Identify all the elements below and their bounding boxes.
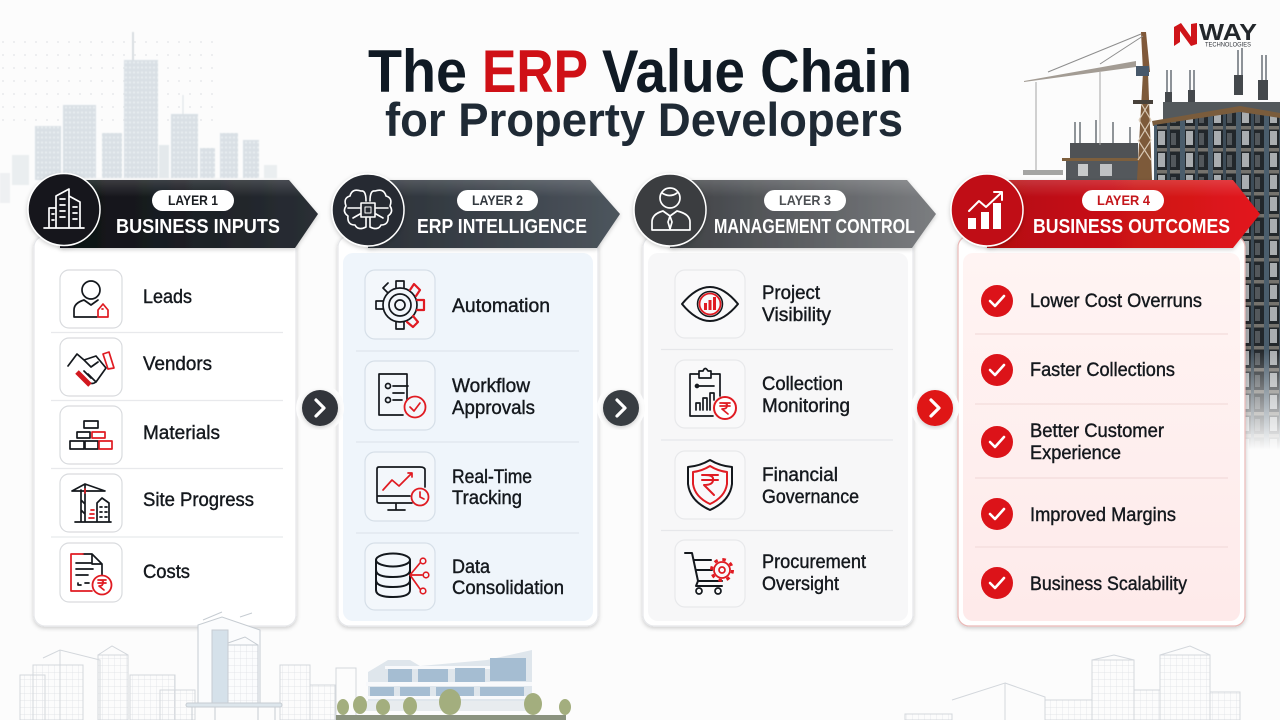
item: site progress (60, 474, 254, 532)
layer 1 pill (152, 190, 234, 211)
panel 3 header (634, 174, 936, 248)
item: collection monitoring (675, 360, 850, 428)
panel 4 header: LAYER 4 (1097, 192, 1150, 208)
construction photo, top right (1023, 32, 1280, 475)
item: data consolidation: Consolidation (452, 578, 564, 599)
item: improved margins: Improved Margins (1030, 505, 1176, 526)
item: data consolidation (365, 543, 564, 610)
arrow: layer 1 to layer 2 (296, 384, 344, 432)
item: procurement oversight (675, 540, 867, 607)
item: real-time tracking: Tracking (452, 488, 522, 509)
panel 1 header: BUSINESS INPUTS (116, 216, 280, 238)
layer 2 pill (457, 190, 538, 211)
item: workflow approvals: Workflow (452, 376, 530, 397)
arrow: layer 2 to layer 3 (597, 384, 645, 432)
item: business scalability (981, 567, 1187, 599)
panel: layer 2 erp intelligence (332, 174, 620, 626)
sketch cityscape, bottom right (905, 646, 1240, 720)
panel 4 header: BUSINESS OUTCOMES (1033, 216, 1230, 238)
tower crane (1024, 32, 1153, 180)
panel 1 header (28, 174, 318, 248)
small building under construction (1023, 120, 1142, 181)
title: Value Chain (602, 38, 912, 105)
title: ERP (482, 38, 588, 105)
sketch cityscape, bottom left (20, 646, 356, 720)
dotted background pattern (0, 30, 220, 130)
icon: brain with chip (344, 190, 392, 229)
arrow: layer 3 to layer 4 (911, 384, 959, 432)
item: better customer experience: Experience (1030, 443, 1121, 464)
item: better customer experience: Better Customer (1030, 421, 1165, 442)
item: real-time tracking: Real-Time (452, 467, 532, 488)
title (368, 38, 912, 146)
item: vendors: Vendors (143, 354, 212, 375)
item: automation (365, 270, 550, 339)
logo: NWAY Technologies: WAY (1199, 19, 1257, 45)
logo: NWAY Technologies: TECHNOLOGIES (1205, 42, 1251, 48)
sketch building with blue glass (186, 612, 282, 720)
item: project visibility: Visibility (762, 305, 832, 326)
item: materials (60, 406, 220, 464)
main concrete building (1152, 48, 1280, 470)
panel 1 header: LAYER 1 (168, 192, 218, 208)
item: leads (60, 270, 192, 328)
panel 4 card (958, 236, 1245, 626)
item: lower cost overruns: Lower Cost Overruns (1030, 291, 1202, 312)
item: faster collections (981, 354, 1175, 386)
modern building with trees (336, 650, 571, 720)
item: data consolidation: Data (452, 557, 490, 578)
icon: office buildings (44, 189, 84, 228)
item: workflow approvals (365, 361, 535, 430)
item: procurement oversight: Oversight (762, 574, 840, 595)
title: The (368, 38, 467, 105)
layer 4 pill (1082, 190, 1164, 211)
layer 3 pill (764, 190, 846, 211)
icon: growth chart (968, 192, 1002, 229)
panel 2 header: LAYER 2 (472, 192, 523, 208)
item: collection monitoring: Monitoring (762, 396, 850, 417)
item: procurement oversight: Procurement (762, 552, 867, 573)
fade of building into page (1150, 350, 1280, 450)
item: financial governance: Governance (762, 487, 859, 508)
panel 2 header (332, 174, 620, 248)
panel 4 header (951, 174, 1260, 248)
item: faster collections: Faster Collections (1030, 360, 1175, 381)
item: real-time tracking (365, 452, 532, 521)
skyline illustration, top left (0, 32, 277, 203)
panel: layer 4 business outcomes (951, 174, 1260, 626)
item: lower cost overruns (981, 285, 1202, 317)
item: site progress: Site Progress (143, 490, 254, 511)
item: costs (60, 543, 190, 602)
item: collection monitoring: Collection (762, 374, 843, 395)
panel: layer 3 management control (634, 174, 936, 626)
item: financial governance (675, 451, 859, 519)
item: leads: Leads (143, 287, 192, 308)
item: project visibility: Project (762, 283, 821, 304)
panel 2 header: ERP INTELLIGENCE (417, 216, 587, 238)
item: materials: Materials (143, 423, 220, 444)
item: better customer experience (981, 421, 1165, 464)
panel 1 card (34, 236, 296, 626)
item: vendors (60, 338, 212, 396)
logo: NWAY Technologies (1174, 19, 1257, 48)
panel 2 card (338, 236, 598, 626)
item: financial governance: Financial (762, 465, 838, 486)
panel 3 header: LAYER 3 (779, 192, 831, 208)
item: project visibility (675, 270, 832, 338)
icon: manager (652, 188, 690, 230)
panel: layer 1 business inputs (28, 174, 318, 626)
panel 3 header: MANAGEMENT CONTROL (714, 216, 915, 238)
item: costs: Costs (143, 562, 190, 583)
item: business scalability: Business Scalability (1030, 574, 1187, 595)
title: for Property Developers (385, 93, 903, 146)
item: workflow approvals: Approvals (452, 398, 535, 419)
item: automation: Automation (452, 296, 550, 317)
item: improved margins (981, 498, 1176, 530)
panel 3 card (643, 236, 913, 626)
